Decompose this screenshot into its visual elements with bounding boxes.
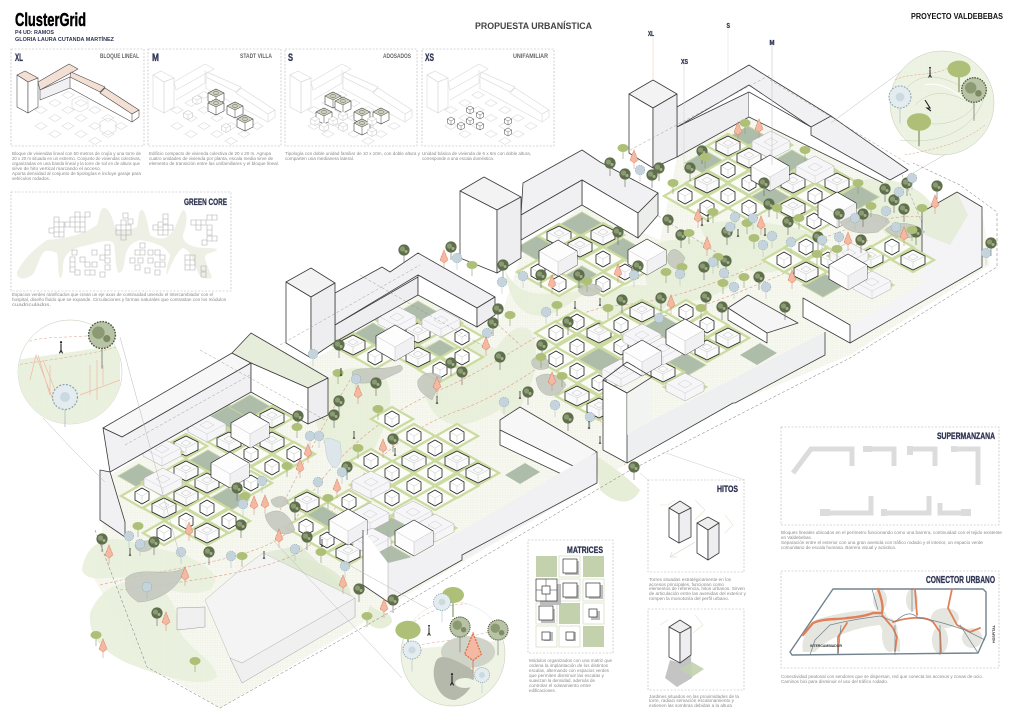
panel text: S: Tipología con doble unidad familiar de 10 x 10m, con doble altura y xyxy=(285,151,421,156)
panel: XS unifamiliar: XS xyxy=(425,52,434,64)
perimeter buildings: lower-centre block xyxy=(363,407,597,602)
panel text: supermanzana: comunitario de escala humana. Barrera visual y acústica. xyxy=(781,545,896,550)
gazebo shaded pavilions xyxy=(126,214,925,602)
panel text: XL xyxy=(12,151,142,181)
panel text: green core: cuadriculados. xyxy=(12,302,51,307)
panel text: matrices xyxy=(529,658,613,693)
trees: blue xyxy=(124,165,991,599)
panel text: conector urbano: Conectividad peatonal con sendores que se dispersan, red que conecta los accesos y zonas de ocio. xyxy=(781,674,983,679)
panel: S adosados xyxy=(285,49,417,146)
trees: light green xyxy=(90,119,928,672)
panel: hitos: HITOS xyxy=(717,484,738,495)
panel: M stadt villa: STADT VILLA xyxy=(240,54,273,60)
project heading: PROYECTO VALDEBEBAS xyxy=(911,12,1004,21)
panel: XL bloque lineal: BLOQUE LINEAL xyxy=(100,54,139,60)
perimeter buildings: cluster 1 L-block xyxy=(100,333,328,537)
panel text: matrices: ordena la implantación de los distintos xyxy=(529,663,609,668)
housing cluster 1: lower-left modules xyxy=(118,395,315,545)
perimeter buildings: cluster 2 tower and L-block xyxy=(280,253,495,358)
panel text: XL: Aporta densidad al conjunto de tipologías e incluye garaje para xyxy=(12,171,142,176)
panel text: hitos: rompen la monotonía del perfil urbano. xyxy=(649,596,729,601)
panel text: hitos xyxy=(649,577,747,601)
panel text: M: elemento de transición entre las unifamiliares y el bloque lineal. xyxy=(149,161,279,166)
panel text: M xyxy=(149,151,279,166)
panel: XL bloque lineal xyxy=(11,49,144,146)
panel text: XL: organizadas en una banda lineal y la torre de sol en de altura que xyxy=(12,161,141,166)
panel text: supermanzana: Bloques lineales ubicados en el perímetro funcionando como una barrera, continuidad con el tejido existente xyxy=(781,530,1003,535)
panel text: matrices: Módulos organizados con una matriz que xyxy=(529,658,613,663)
panel text: XL: 20 x 20 m situada en un extremo. Conjunto de viviendas colectivas, xyxy=(12,156,141,161)
height labels XL S XS M with leader lines: XL xyxy=(648,31,654,38)
zoom circle: lower pavilion xyxy=(273,540,508,706)
panel: XS unifamiliar xyxy=(422,49,554,146)
panel text: matrices: escalas, alternando con espacios verdes xyxy=(529,668,610,673)
panel: hitos xyxy=(640,452,745,572)
trees: orange xyxy=(99,119,939,658)
panel text: matrices: edificaciones. xyxy=(529,688,556,693)
panel: green core xyxy=(11,192,231,291)
pedestrians xyxy=(129,214,766,559)
panel text: XS: corresponde a una escala doméstica. xyxy=(422,156,494,161)
panel: green core: GREEN CORE xyxy=(184,197,227,208)
panel text: M: cuatro unidades de vivienda por planta, escala media sirve de xyxy=(149,156,274,161)
panel text: supermanzana xyxy=(781,530,1003,550)
panel: XS unifamiliar: UNIFAMILIAR xyxy=(513,54,549,60)
perimeter buildings: right end block xyxy=(803,192,982,343)
trees: dark xyxy=(96,145,997,626)
panel text: hitos: accesos principales, funcionan como xyxy=(649,582,725,587)
panel text: tower shadow: torre, radiaci semación escalonamiento y xyxy=(649,698,735,703)
section heading: PROPUESTA URBANÍSTICA xyxy=(475,21,592,32)
panel text: supermanzana: Separación entre el exterior con una gran avenida con tráfico rodado y el interior, un espacio verde xyxy=(781,540,984,545)
panel: matrices: MATRICES xyxy=(567,545,603,556)
panel text: green core: Espacios verdes ramificados que crean un eje axus de continuidad uniendo el Intercambiador con el xyxy=(12,292,213,297)
panel text: tower shadow: Jardines situados en las proximidades de la xyxy=(649,694,740,699)
panel text: XL: Bloque de viviendas lineal con 50 metros de crujía y una torre de xyxy=(12,151,142,156)
height labels XL S XS M with leader lines xyxy=(648,23,775,170)
height labels XL S XS M with leader lines: S xyxy=(726,23,730,30)
panel text: M: Edificio compacto de vivienda colectiva de 20 x 20 m. Agrupa xyxy=(149,151,272,156)
panel: M stadt villa: M xyxy=(152,52,159,64)
panel text: matrices: suavizan la densidad, además de xyxy=(529,678,596,683)
height labels XL S XS M with leader lines: M xyxy=(770,40,775,47)
housing cluster 3: central modules xyxy=(535,300,749,420)
panel text: green core xyxy=(12,292,227,307)
panel: matrices xyxy=(528,540,613,653)
housing cluster 1b: central-lower modules xyxy=(285,407,499,569)
title block: ClusterGrid xyxy=(15,10,86,30)
panel: conector urbano: HOSPITAL xyxy=(992,624,996,643)
pedestrian paths dashed xyxy=(100,170,960,590)
panel: S adosados: ADOSADOS xyxy=(383,54,411,60)
panel text: hitos: elementos de referencia, hitos urbanos. Sirven xyxy=(649,586,746,591)
panel text: hitos: Torres situadas estratégicamente en los xyxy=(649,577,732,582)
panel text: XL: vehículos rodados. xyxy=(12,176,50,181)
panel: S adosados: S xyxy=(288,52,293,64)
panel text: XS xyxy=(422,151,531,161)
perimeter buildings: centre long wall and tower xyxy=(603,295,825,463)
central park pond xyxy=(324,438,341,468)
panel text: hitos: de articulación entre las avenidas del exterior y xyxy=(649,591,747,596)
panel: M stadt villa xyxy=(148,49,281,146)
panel text: matrices: que permiten disminuir las escalas y xyxy=(529,673,605,678)
outer dashed site boundary xyxy=(95,163,997,708)
panel text: S xyxy=(285,151,421,161)
panel: supermanzana: SUPERMANZANA xyxy=(937,431,995,442)
panel text: tower shadow: extienen las sombras debidas a la altura xyxy=(649,703,733,708)
panel: tower shadow xyxy=(648,609,744,690)
panel: XL bloque lineal: XL xyxy=(15,52,23,64)
panel text: matrices: controlar el soleamiento entre xyxy=(529,683,592,688)
masterplan axonometric: ground xyxy=(82,117,990,708)
perimeter buildings: upper-right tower XL and long block xyxy=(629,65,910,183)
housing cluster 2: centre-left modules xyxy=(332,301,483,382)
title block xyxy=(15,10,115,43)
panel text: XL: sirve de hito vertical marcando el acceso. xyxy=(12,166,101,171)
panel text: tower shadow xyxy=(649,694,740,708)
panel: conector urbano: INTERCAMBIADOR xyxy=(810,644,842,648)
housing cluster 2b: upper-centre modules xyxy=(516,212,666,296)
panel text: S: comparten una medianera lateral. xyxy=(285,156,354,161)
title block: P4 UD: RAMOS xyxy=(15,30,54,36)
zoom circle: upper-right park xyxy=(831,51,994,173)
hospital building xyxy=(177,545,355,683)
panel: supermanzana xyxy=(781,427,999,525)
zoom circle: left garden xyxy=(15,320,180,557)
panel text: XS: Unidad básica de vivienda de 6 x 6m con doble altura, xyxy=(422,151,531,156)
panel text: supermanzana: en Valdebebas. xyxy=(781,535,812,540)
title block: GLORIA LAURA CUTANDA MARTÍNEZ xyxy=(15,35,115,43)
housing cluster 4: upper-right modules xyxy=(664,126,934,299)
panel text: conector urbano: Caminos bici para disminuir el uso del tráfico rodado. xyxy=(781,679,888,684)
panel: conector urbano xyxy=(781,571,999,668)
perimeter buildings: upper-centre tower and L-block xyxy=(460,150,658,273)
height labels XL S XS M with leader lines: XS xyxy=(681,59,688,66)
panel text: conector urbano xyxy=(781,674,983,684)
panel text: green core: hospital, diseño fluido que se expande. Circulaciones y formas naturales que contrastan con los módulos xyxy=(12,297,227,302)
